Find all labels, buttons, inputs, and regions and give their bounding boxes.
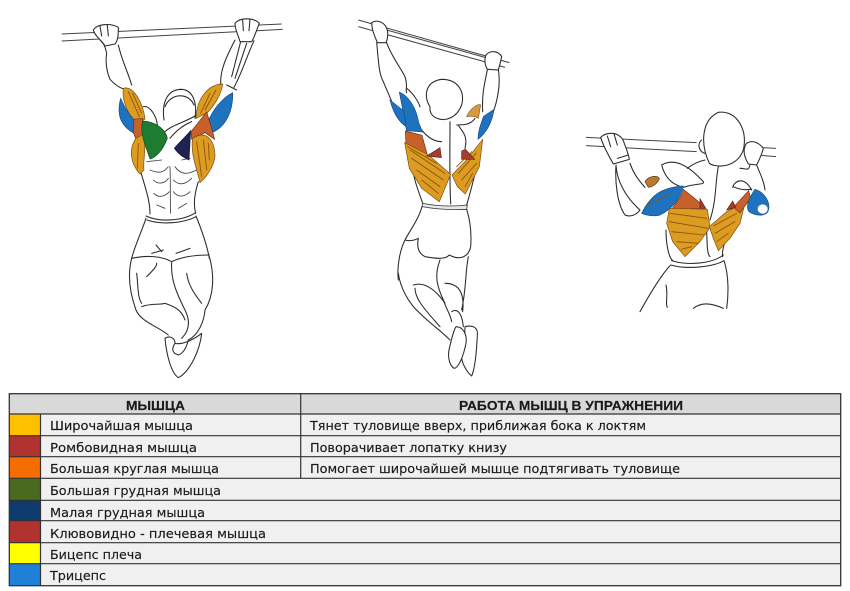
legend row: pectoralis major: Большая грудная мышца [50,484,221,498]
waistband [422,203,467,210]
legend row: rhomboid [9,436,507,457]
table header background [9,394,841,414]
muscle: triceps, left [642,186,683,216]
muscle: latissimus, left [405,143,451,202]
legend row: pectoralis minor [9,500,205,521]
muscle: triceps, left [390,100,407,127]
legend row: teres major: Большая круглая мышца [50,462,219,476]
head [426,79,462,120]
muscle: latissimus, right [192,135,215,183]
muscle: teres, right [191,112,215,139]
muscle: triceps, right [478,109,494,139]
muscle fibres [645,193,737,249]
arms [377,43,499,112]
legend row: triceps: Трицепс [49,569,106,583]
head [163,89,196,120]
muscle: latissimus, right [709,202,745,251]
elbow highlight [758,204,768,214]
legs [398,257,468,340]
legend row: teres major: Помогает широчайшей мышце подтягивать туловище [310,462,680,476]
muscle: triceps, right [208,93,233,132]
legend row: pectoralis major [9,478,221,500]
legend row: pectoralis minor: Малая грудная мышца [50,506,205,520]
column heading: muscle: МЫШЦА [126,398,186,413]
muscle: shoulder patch, right [467,105,481,118]
pull-up bar [62,24,283,41]
hands [372,21,502,70]
legend row: biceps [9,543,142,564]
muscle: latissimus, right [452,139,483,194]
muscle: pectoralis major [142,121,167,159]
muscle: latissimus, left [667,208,710,257]
figure: front view, wide grip pull-up with knees bent [62,19,283,378]
waistband [146,213,196,223]
table: muscles and their work in the exercise [9,394,841,586]
shorts [132,216,209,262]
shorts [398,207,471,280]
table body background [9,414,841,586]
legend row: triceps [9,564,106,586]
hands [93,19,259,46]
figure: back view, behind-the-neck pull-up, close crop [586,112,776,312]
muscle: upper arm latissimus area, left [123,88,145,123]
legend row: biceps: Бицепс плеча [50,548,142,562]
muscle: rhomboid [427,148,475,159]
muscle fibres [407,147,477,193]
arms [100,40,254,90]
legend row: latissimus dorsi [9,414,646,436]
pull-up bar [586,137,776,157]
arms and shoulders [616,160,765,220]
muscle: rhomboid [700,199,736,210]
muscle: teres major, left [405,131,427,155]
muscle: pectoralis minor [174,131,191,160]
legend row: teres major [9,457,680,478]
muscle: teres major, left [672,189,706,209]
hands [601,133,763,165]
column heading: work of muscles: РАБОТА МЫШЦ В УПРАЖНЕНИИ [459,398,683,413]
back, waist [413,118,478,205]
torso and abdominals [141,107,198,214]
muscle: teres, left [133,118,145,143]
figure: back view, bar angled, legs crossed [358,20,509,376]
legend row: coracobrachialis: Клювовидно - плечевая мышца [50,527,266,541]
legend row: rhomboid: Ромбовидная мышца [50,441,197,455]
legend row: latissimus dorsi: Широчайшая мышца [50,419,193,433]
muscle: teres major, right [733,191,751,213]
pull-up bar [358,20,509,67]
feet [462,326,477,376]
legend row: coracobrachialis [9,521,266,543]
torso, waistband and shorts [640,230,728,312]
muscle: biceps patch, left [645,176,659,187]
legend row: rhomboid: Поворачивает лопатку книзу [310,441,507,455]
muscle fibres [128,90,216,177]
muscle: triceps head, left [399,92,423,132]
muscle: triceps, left [119,98,138,133]
legs [130,257,213,340]
muscle: triceps, right [747,189,769,215]
muscle: upper arm latissimus area, right [196,84,223,118]
head [699,112,744,166]
feet [165,333,202,378]
legend row: latissimus dorsi: Тянет туловище вверх, приближая бока к локтям [309,419,646,433]
muscle: latissimus, left [131,134,145,174]
